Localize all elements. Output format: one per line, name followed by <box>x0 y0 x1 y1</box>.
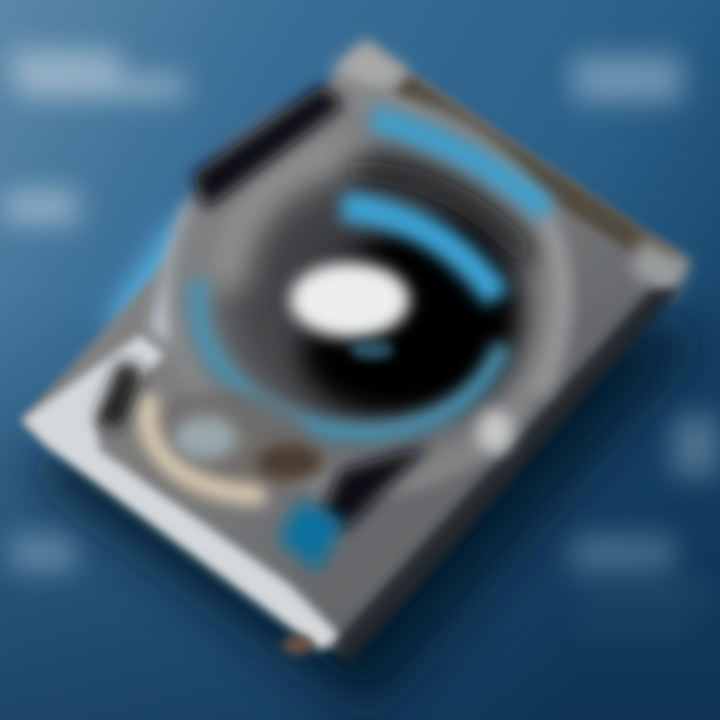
silver bottom-left edge <box>22 335 345 650</box>
blue arc: inner top <box>342 207 498 298</box>
grey upper platter sweep <box>225 150 370 290</box>
blurred label: top right <box>572 56 682 102</box>
platter <box>165 95 565 495</box>
blurred label: middle left <box>4 190 78 224</box>
actuator: dark slot <box>108 365 132 425</box>
dark top-left edge <box>192 85 345 210</box>
silver outer ring right <box>540 215 564 395</box>
actuator: dark base <box>140 390 310 500</box>
black swoosh at top <box>350 170 530 260</box>
brown bottom corner <box>282 635 314 655</box>
lower right panel <box>340 290 660 640</box>
white connector <box>477 410 513 454</box>
actuator: brown joint <box>256 444 324 480</box>
blurred label: lower left <box>10 535 76 571</box>
silver top corner <box>330 40 410 92</box>
silver right corner <box>630 238 690 300</box>
spindle highlight <box>290 262 410 338</box>
blue square <box>278 500 345 572</box>
black platter core <box>300 216 520 416</box>
actuator: grey centre <box>173 416 237 460</box>
drive body <box>22 42 690 655</box>
actuator: cream arc <box>147 395 265 495</box>
blurred label: lower right <box>570 535 710 632</box>
dark block beside square <box>320 445 430 530</box>
olive top-right edge <box>395 75 680 275</box>
dark lower-right rim <box>332 288 682 665</box>
drop shadow under drive <box>30 300 710 715</box>
pale left corner wall <box>150 205 205 345</box>
blurred label: middle right <box>672 415 720 477</box>
blue glow at left edge <box>105 215 205 345</box>
blue arc: outer top <box>372 118 548 212</box>
blurred label: top left <box>10 50 185 98</box>
blue arc: lower ring <box>198 280 503 433</box>
small blue reflection <box>350 340 394 360</box>
